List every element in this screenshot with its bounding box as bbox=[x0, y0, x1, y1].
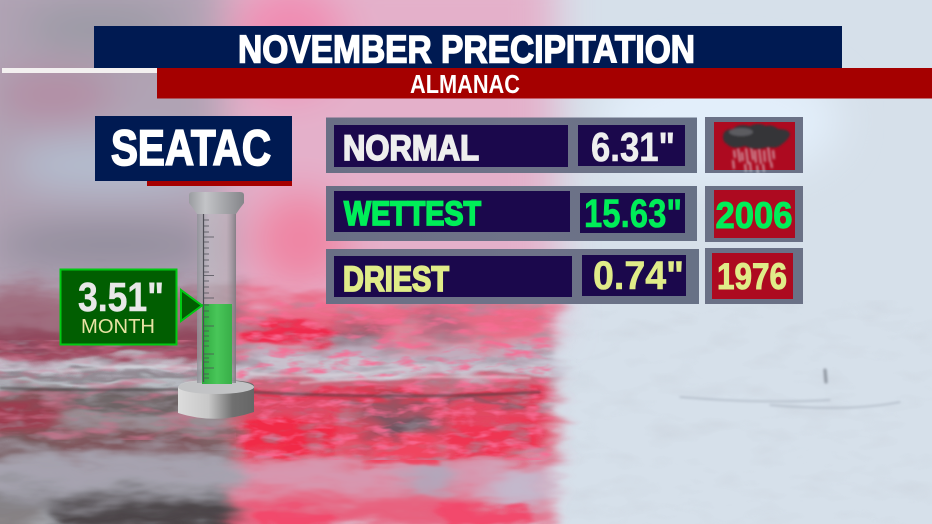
panel: wettest year bbox=[705, 186, 803, 242]
value: normal: 6.31" bbox=[591, 124, 675, 170]
subtitle banner bbox=[2, 68, 932, 99]
callout value: 3.51" bbox=[78, 274, 164, 320]
panel: driest row bbox=[326, 249, 699, 304]
callout caption: MONTH bbox=[81, 316, 155, 338]
panel: normal row bbox=[326, 118, 697, 173]
panel: wettest row bbox=[326, 186, 697, 241]
icon: rain cloud bbox=[723, 124, 790, 174]
label: driest: DRIEST bbox=[343, 260, 449, 299]
rain gauge bbox=[178, 192, 254, 419]
value: driest: 0.74" bbox=[593, 254, 684, 298]
label: normal: NORMAL bbox=[343, 129, 479, 168]
callout: month total bbox=[60, 270, 176, 344]
panel: driest year bbox=[705, 248, 803, 304]
location text: SEATAC bbox=[111, 120, 271, 176]
panel: rain icon bbox=[705, 117, 803, 174]
title banner bbox=[94, 26, 842, 72]
value: 1976: 1976 bbox=[717, 256, 787, 297]
location label bbox=[95, 116, 292, 186]
value: wettest: 15.63" bbox=[584, 192, 682, 236]
subtitle text: ALMANAC bbox=[410, 71, 520, 99]
label: wettest: WETTEST bbox=[344, 195, 481, 233]
arrow: callout pointer bbox=[181, 290, 202, 321]
title text: NOVEMBER PRECIPITATION bbox=[238, 28, 695, 72]
value: 2006: 2006 bbox=[716, 195, 792, 236]
